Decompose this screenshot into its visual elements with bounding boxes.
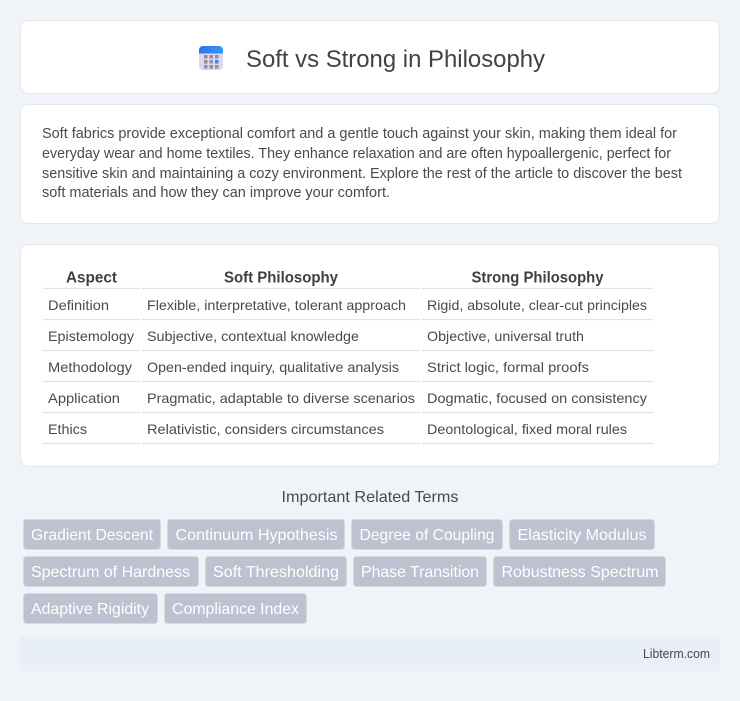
tag: Compliance Index	[172, 601, 299, 618]
tag	[494, 556, 666, 586]
tag	[24, 520, 160, 550]
tag	[164, 594, 306, 624]
table header: Strong Philosophy	[472, 270, 604, 286]
icon: calendar	[199, 46, 223, 70]
footer: Libterm.com	[643, 647, 710, 661]
tag: Elasticity Modulus	[518, 527, 646, 544]
tag	[352, 520, 502, 550]
row: epistemology: Subjective, contextual knowledge	[147, 328, 359, 344]
panel: related term tags	[24, 520, 666, 624]
tag: Spectrum of Hardness	[31, 564, 190, 581]
tag	[24, 594, 158, 624]
row: methodology	[48, 359, 589, 375]
row: application: Pragmatic, adaptable to diverse scenarios	[147, 390, 415, 406]
tag: Soft Thresholding	[213, 564, 339, 581]
row: application	[48, 390, 647, 406]
tag	[510, 520, 654, 550]
row: application: Dogmatic, focused on consistency	[427, 390, 647, 406]
row: epistemology	[48, 328, 584, 344]
tag	[24, 556, 198, 586]
row: ethics: Ethics	[48, 421, 87, 437]
row: methodology: Methodology	[48, 359, 132, 375]
tag: Robustness Spectrum	[502, 564, 658, 581]
text block: introduction	[42, 126, 682, 201]
panel: header	[20, 20, 720, 94]
tag: Phase Transition	[361, 564, 479, 581]
tag: Continuum Hypothesis	[176, 527, 338, 544]
row: definition: Flexible, interpretative, tolerant approach	[147, 297, 406, 313]
table header: Aspect	[66, 270, 117, 286]
panel: introduction	[20, 104, 720, 224]
tag	[168, 520, 344, 550]
table header	[66, 270, 604, 286]
row: ethics: Relativistic, considers circumstances	[147, 421, 384, 437]
row: ethics: Deontological, fixed moral rules	[427, 421, 627, 437]
title: Soft vs Strong in Philosophy	[246, 46, 545, 73]
row: methodology: Open-ended inquiry, qualitative analysis	[147, 359, 399, 375]
tag: Degree of Coupling	[360, 527, 494, 544]
text block: introduction: sensitive skin and maintaining a cozy environment. Explore the rest of the article to discover the best	[42, 166, 682, 182]
text block: introduction: Soft fabrics provide exceptional comfort and a gentle touch against your skin, making them ideal for	[42, 126, 677, 142]
row: definition: Definition	[48, 297, 109, 313]
panel: comparison table	[20, 244, 720, 466]
text block: introduction: soft materials and how they can improve your comfort.	[42, 185, 390, 201]
row: ethics	[48, 421, 627, 437]
tag	[206, 556, 346, 586]
heading: related terms: Important Related Terms	[282, 489, 458, 506]
tag: Adaptive Rigidity	[31, 601, 149, 618]
footer	[20, 637, 720, 671]
row: definition: Rigid, absolute, clear-cut principles	[427, 297, 647, 313]
row: methodology: Strict logic, formal proofs	[427, 359, 589, 375]
row: application: Application	[48, 390, 120, 406]
text block: introduction: everyday wear and home textiles. They enhance relaxation and are often hypoallergenic, perfect for	[42, 146, 671, 162]
table header: Soft Philosophy	[224, 270, 338, 286]
row: epistemology: Epistemology	[48, 328, 134, 344]
tag	[354, 556, 486, 586]
row: epistemology: Objective, universal truth	[427, 328, 584, 344]
row: definition	[48, 297, 647, 313]
tag: Gradient Descent	[31, 527, 154, 544]
